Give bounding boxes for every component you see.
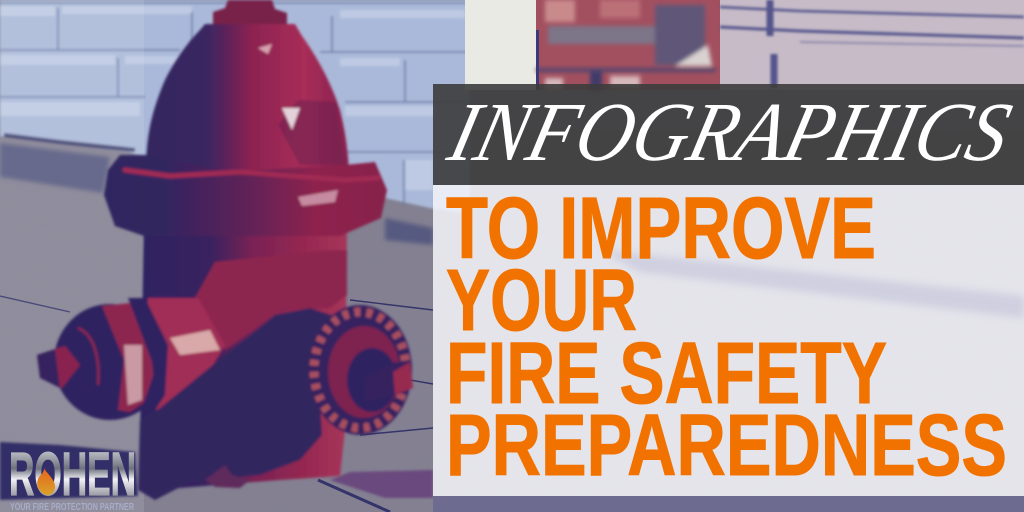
flange highlight — [125, 170, 378, 180]
right nozzle cap — [308, 305, 413, 435]
cap base — [308, 305, 412, 435]
big shadow under nozzles — [138, 308, 340, 500]
dome chipped paint — [258, 44, 345, 184]
logo backing — [0, 442, 138, 500]
panel: title band — [433, 84, 1024, 185]
headline text: YOUR — [446, 252, 637, 349]
logo wordmark: ROHEN — [9, 440, 136, 508]
debris at base — [205, 465, 250, 488]
nozzle barrel — [140, 298, 225, 412]
purple ground stain — [330, 470, 433, 498]
hydrant dome — [146, 24, 349, 172]
pavement texture — [0, 130, 1024, 512]
icon: flame — [37, 468, 55, 495]
cap centre recess — [347, 348, 397, 412]
hydrant flange band — [104, 155, 387, 236]
hydrant top nut — [213, 0, 287, 25]
left tint overlay — [0, 0, 144, 512]
white wall column — [465, 0, 537, 90]
brick column — [536, 0, 720, 90]
nozzle cap dark — [54, 304, 166, 420]
nozzle inner ring — [78, 328, 98, 385]
serrated cap ring — [314, 312, 406, 428]
fire hydrant — [37, 0, 413, 500]
nozzle nut — [37, 346, 80, 388]
headline text: FIRE SAFETY — [446, 325, 887, 422]
nozzle dark gasket — [128, 298, 168, 418]
bottom pavement strip — [433, 496, 1024, 512]
headline text — [446, 180, 1007, 494]
nozzle cap red ring — [102, 303, 155, 412]
logo: Rohen — [0, 440, 138, 512]
pavement shadow seen through panel — [600, 250, 1024, 318]
hydrant body — [139, 225, 347, 490]
headline text: TO IMPROVE — [446, 180, 876, 277]
left nozzle — [37, 298, 225, 420]
pavement — [0, 130, 1024, 512]
far sidewalk — [720, 0, 1024, 90]
panel: orange headline — [433, 180, 1024, 496]
cap nut — [365, 362, 412, 402]
pavement cracks — [0, 296, 433, 512]
upper body light — [195, 250, 347, 350]
brick wall — [0, 0, 470, 214]
wall shadow on pavement — [0, 143, 110, 193]
